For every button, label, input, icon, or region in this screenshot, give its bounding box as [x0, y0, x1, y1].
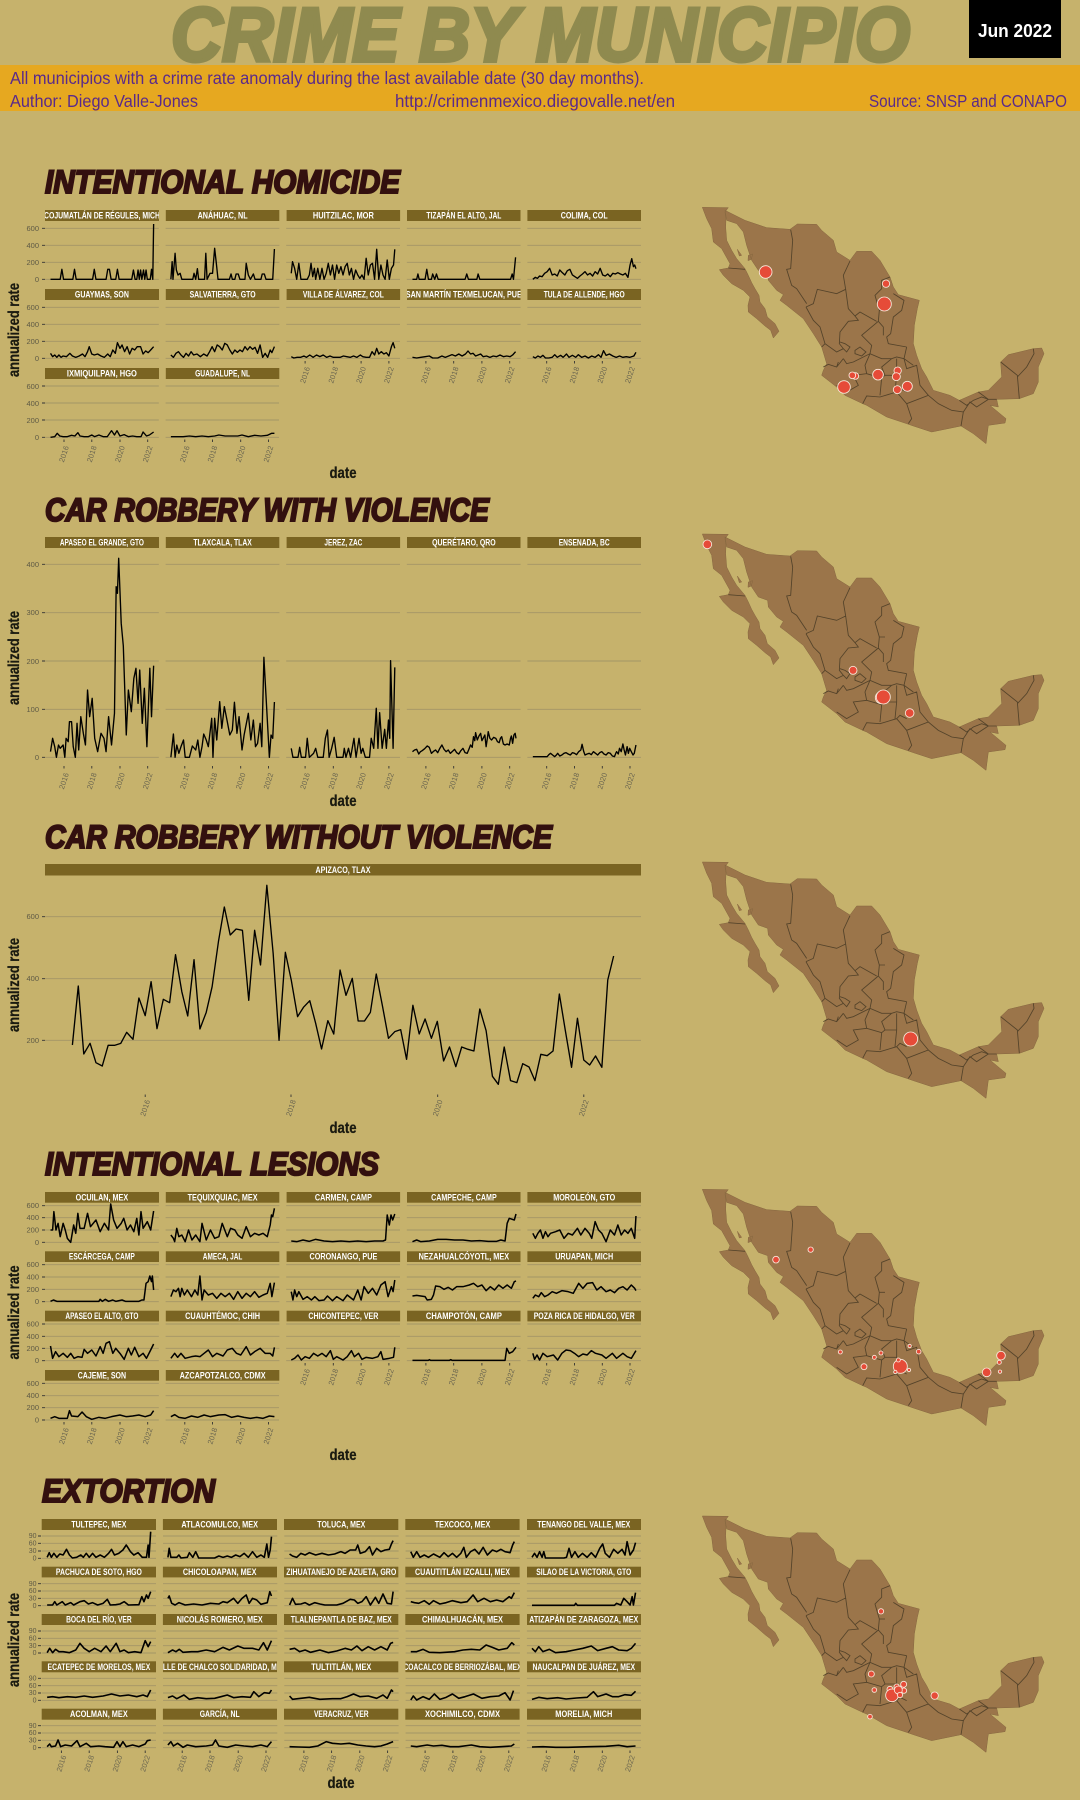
panel: Ensenada: ENSENADA, BC: [559, 538, 610, 548]
x axis labels: 2020: [354, 772, 368, 790]
y axis labels: 60: [29, 1540, 37, 1548]
panel: Atlacomulco: [163, 1519, 277, 1558]
x axis labels: 2022: [262, 1427, 275, 1445]
x axis labels: 2022: [382, 772, 396, 790]
x axis labels: 2020: [113, 1427, 127, 1445]
panel: Campeche: [407, 1192, 520, 1242]
panel: Morelia: [527, 1709, 641, 1747]
panel: Valle de Chalco: [154, 1661, 286, 1699]
panel: Atizapán: [527, 1614, 641, 1653]
section: intentional lesions: [6, 1146, 641, 1464]
panel: Acolman: ACOLMAN, MEX: [70, 1709, 128, 1719]
y axis labels: 200: [26, 1226, 39, 1234]
panel: Cojumatlán: [44, 210, 160, 279]
section: extortion: [6, 1473, 641, 1792]
panel: Carmen: [287, 1192, 400, 1242]
y axis labels: 200: [26, 1036, 39, 1045]
y axis labels: [26, 224, 39, 442]
map: intentional lesions: [702, 1189, 1044, 1426]
date badge: Jun 2022: [978, 21, 1052, 41]
panel: Tultepec: [42, 1519, 156, 1558]
x axis labels: 2016: [539, 1754, 553, 1773]
x axis labels: 2016: [178, 772, 192, 790]
x axis labels: 2020: [353, 1754, 367, 1773]
x axis labels: 2020: [431, 1099, 445, 1117]
panel: Cuautitlán Izcalli: [405, 1567, 520, 1604]
x axis labels: 2018: [326, 1368, 340, 1386]
y axis labels: 200: [26, 416, 39, 425]
y axis labels: 400: [26, 974, 39, 983]
panel: Tenango del Valle: [527, 1519, 641, 1558]
x axis labels: 2018: [446, 1754, 460, 1773]
x axis labels: 2022: [623, 1368, 637, 1386]
y axis labels: 0: [35, 1356, 39, 1365]
heading: INTENTIONAL LESIONS: [45, 1146, 380, 1182]
y axis labels: 30: [29, 1738, 37, 1744]
panel: Tlaxcala: [166, 537, 279, 757]
x axis labels: 2022: [623, 772, 637, 790]
panel: Apaseo el Alto: [45, 1311, 159, 1359]
y axis labels: 0: [33, 1650, 37, 1657]
x axis labels: 2020: [475, 366, 489, 384]
x axis labels: 2022: [502, 1754, 516, 1773]
panel: Escárcega: [45, 1251, 159, 1301]
x axis labels: 2016: [175, 1754, 189, 1773]
x axis labels: 2018: [203, 1754, 217, 1773]
y axis title: annualized rate: [6, 938, 23, 1032]
y axis labels: 600: [26, 224, 39, 233]
x axis labels: 2022: [623, 366, 637, 384]
heading: EXTORTION: [42, 1473, 216, 1509]
panel: Cuauhtémoc: CUAUHTÉMOC, CHIH: [185, 1311, 260, 1321]
panel: García: [163, 1709, 277, 1747]
panel: Tlalnepantla: [284, 1614, 398, 1653]
y axis labels: 90: [29, 1581, 37, 1588]
y axis labels: 600: [26, 912, 39, 921]
x axis labels: 2020: [113, 772, 127, 790]
y axis labels: 100: [26, 705, 39, 714]
panel: Ameca: AMECA, JAL: [203, 1252, 243, 1262]
panel: Veracruz: [284, 1709, 398, 1747]
panel: Anáhuac: ANÁHUAC, NL: [198, 210, 248, 220]
panel: Ecatepec: [42, 1661, 156, 1698]
panel: Naucalpan: [527, 1661, 641, 1699]
x axis labels: 2018: [206, 445, 219, 463]
x axis labels: 2016: [419, 366, 433, 384]
y axis labels: 0: [35, 1238, 39, 1247]
panel: Boca del Río: [42, 1614, 156, 1653]
x axis labels: 2020: [234, 445, 248, 463]
panel: Toluca: TOLUCA, MEX: [317, 1520, 365, 1530]
x axis labels: 2016: [419, 772, 433, 790]
x axis labels: 2016: [540, 366, 554, 384]
panel: Azcapotzalco: AZCAPOTZALCO, CDMX: [180, 1370, 266, 1380]
panel: Tlaxcala: TLAXCALA, TLAX: [193, 538, 252, 548]
x axis title: date: [330, 1447, 357, 1464]
panel: Apaseo el Grande: [45, 537, 159, 757]
panel: Silao: SILAO DE LA VICTORIA, GTO: [536, 1567, 631, 1577]
panel: Pachuca de Soto: PACHUCA DE SOTO, HGO: [56, 1567, 142, 1577]
panel: Champotón: CHAMPOTÓN, CAMP: [426, 1310, 502, 1321]
panel: Colima: COLIMA, COL: [561, 210, 608, 220]
panel: Anáhuac: [166, 210, 279, 279]
heading: CAR ROBBERY WITH VIOLENCE: [45, 492, 490, 528]
header band: All municipios with a crime rate anomaly during the last available date (30 day months).: [10, 68, 644, 88]
panel: Chimalhuacán: [405, 1614, 520, 1653]
x axis labels: 2016: [57, 772, 71, 790]
panel: Chicoloapan: [163, 1567, 277, 1605]
y axis labels: 200: [26, 657, 39, 666]
x axis labels: 2018: [325, 1754, 338, 1773]
y axis labels: 60: [29, 1730, 37, 1737]
panel: Ensenada: [527, 537, 641, 757]
panel: Ecatepec: ECATEPEC DE MORELOS, MEX: [48, 1662, 150, 1672]
panel: Silao: [527, 1567, 641, 1605]
y axis labels: 30: [29, 1548, 37, 1555]
x axis labels: 2020: [354, 366, 368, 384]
panel: Coronango: CORONANGO, PUE: [310, 1252, 377, 1262]
panel: Ixmiquilpan: [45, 368, 159, 437]
panel: Uruapan: URUAPAN, MICH: [555, 1252, 613, 1262]
panel: Poza Rica: POZA RICA DE HIDALGO, VER: [534, 1311, 635, 1321]
x axis title: date: [328, 1775, 355, 1792]
y axis labels: 30: [29, 1596, 37, 1602]
panel: Naucalpan: NAUCALPAN DE JUÁREZ, MEX: [532, 1662, 635, 1672]
map: car robbery without violence: [702, 862, 1044, 1098]
panel: Moroleón: [527, 1191, 641, 1242]
panel: Champotón: [407, 1310, 520, 1360]
panel: Boca del Río: BOCA DEL RÍO, VER: [66, 1614, 132, 1624]
y axis labels: 400: [26, 1213, 39, 1222]
panel: Chimalhuacán: CHIMALHUACÁN, MEX: [422, 1614, 503, 1624]
panel: Texcoco: [405, 1519, 520, 1557]
panel: Xochimilco: [405, 1709, 520, 1747]
x axis labels: 2020: [475, 1368, 489, 1386]
panel: Chicontepec: CHICONTEPEC, VER: [308, 1311, 379, 1321]
y axis labels: [29, 1533, 37, 1752]
y axis labels: 0: [35, 1416, 39, 1424]
y axis labels: 600: [26, 1320, 39, 1328]
panel: Ixmiquilpan: IXMIQUILPAN, HGO: [67, 368, 137, 378]
map: extortion: [702, 1516, 1044, 1752]
x axis labels: 2018: [568, 366, 581, 384]
y axis labels: 200: [26, 1285, 39, 1294]
x axis labels: [138, 1099, 591, 1117]
y axis labels: 0: [33, 1745, 37, 1752]
x axis labels: 2018: [568, 1368, 581, 1386]
panel: Uruapan: [527, 1251, 641, 1298]
y axis labels: [26, 560, 39, 762]
section: car robbery with violence: [6, 492, 641, 810]
panel: Villa de Álvarez: [287, 289, 400, 358]
panel: Cuautitlán Izcalli: CUAUTITLÁN IZCALLI, MEX: [415, 1567, 510, 1577]
y axis labels: 400: [26, 241, 39, 250]
panel: Guaymas: GUAYMAS, SON: [75, 290, 129, 300]
y axis labels: 200: [26, 337, 39, 346]
x axis labels: [57, 1368, 637, 1445]
x axis labels: 2016: [178, 445, 192, 463]
panel: Coacalco: [404, 1661, 522, 1700]
x axis labels: 2016: [298, 1368, 312, 1386]
y axis labels: 0: [35, 433, 39, 442]
x axis labels: 2018: [206, 772, 219, 790]
panel: San Martín Texmelucan: [406, 289, 522, 358]
panel: Cajeme: [45, 1370, 159, 1419]
panel: Moroleón: MOROLEÓN, GTO: [553, 1191, 615, 1202]
x axis labels: 2016: [540, 1368, 554, 1386]
panel: Texcoco: TEXCOCO, MEX: [435, 1520, 490, 1530]
y axis labels: 90: [29, 1628, 37, 1635]
x axis labels: 2018: [568, 772, 581, 790]
y axis title: annualized rate: [6, 611, 23, 705]
panel: Salvatierra: SALVATIERRA, GTO: [190, 290, 256, 300]
x axis labels: 2018: [568, 1754, 581, 1773]
x axis labels: 2018: [326, 366, 340, 384]
y axis labels: 200: [26, 258, 39, 267]
x axis labels: 2016: [540, 772, 554, 790]
section: intentional homicide: [6, 164, 641, 482]
x axis labels: 2018: [326, 772, 340, 790]
x axis labels: 2020: [111, 1754, 124, 1773]
x axis labels: 2022: [503, 772, 517, 790]
x axis labels: 2020: [354, 1368, 368, 1386]
panel: Tizapán: [407, 210, 520, 279]
x axis title: date: [330, 793, 357, 810]
x axis labels: 2018: [82, 1754, 96, 1773]
panel: Villa de Álvarez: VILLA DE ÁLVAREZ, COL: [303, 290, 384, 300]
x axis labels: 2018: [284, 1099, 298, 1117]
panel: Jerez: [287, 537, 400, 757]
panel: Tula de Allende: TULA DE ALLENDE, HGO: [544, 290, 625, 300]
x axis labels: 2022: [577, 1099, 591, 1117]
x axis labels: 2022: [141, 1427, 155, 1445]
y axis labels: 30: [29, 1690, 37, 1697]
y axis labels: 600: [26, 303, 39, 312]
panel: Colima: [527, 210, 641, 279]
panel: Atizapán: ATIZAPÁN DE ZARAGOZA, MEX: [529, 1614, 638, 1624]
panel: Zihuatanejo: ZIHUATANEJO DE AZUETA, GRO: [286, 1567, 396, 1577]
heading: CAR ROBBERY WITHOUT VIOLENCE: [45, 819, 553, 855]
panel: Acolman: [42, 1709, 156, 1747]
x axis labels: 2022: [138, 1754, 152, 1773]
y axis labels: 0: [35, 1297, 39, 1306]
date badge: [969, 0, 1061, 58]
panel: Ocuilan: [45, 1192, 159, 1242]
x axis labels: 2016: [55, 1754, 68, 1773]
y axis labels: 0: [35, 753, 39, 762]
y axis labels: 600: [26, 1260, 39, 1269]
x axis labels: 2022: [503, 1368, 517, 1386]
panel: Toluca: [284, 1519, 398, 1557]
panel: Tultepec: TULTEPEC, MEX: [71, 1520, 126, 1530]
panel: Tequixquiac: [166, 1192, 279, 1242]
panel: Coronango: [287, 1251, 400, 1301]
panel: Nezahualcóyotl: [407, 1251, 520, 1300]
panel: Apizaco: APIZACO, TLAX: [316, 865, 370, 875]
y axis title: annualized rate: [6, 1265, 23, 1360]
panel: Guadalupe: [166, 368, 279, 437]
x axis labels: 2016: [178, 1427, 192, 1445]
y axis labels: 0: [33, 1603, 37, 1610]
panel: Chicoloapan: CHICOLOAPAN, MEX: [183, 1567, 256, 1577]
panel: Apaseo el Grande: APASEO EL GRANDE, GTO: [60, 538, 144, 548]
panel: Apaseo el Alto: APASEO EL ALTO, GTO: [65, 1311, 138, 1321]
x axis labels: 2016: [419, 1368, 433, 1386]
map: car robbery with violence: [702, 534, 1044, 770]
panel: Nicolás Romero: NICOLÁS ROMERO, MEX: [177, 1614, 263, 1624]
x axis title: date: [330, 465, 357, 482]
panel: Ameca: [166, 1251, 279, 1300]
panel: Ocuilan: OCUILAN, MEX: [76, 1192, 128, 1202]
x axis labels: 2020: [595, 1368, 609, 1386]
y axis labels: 400: [26, 560, 39, 569]
panel: Huitzilac: [287, 210, 400, 279]
panel: Cuauhtémoc: [166, 1311, 279, 1358]
panel: Querétaro: QUERÉTARO, QRO: [432, 538, 496, 548]
x axis labels: 2020: [234, 772, 248, 790]
x axis labels: 2016: [297, 1754, 311, 1773]
panel: Zihuatanejo: [284, 1567, 398, 1605]
panel: Pachuca de Soto: [42, 1567, 156, 1605]
y axis labels: 90: [29, 1723, 37, 1730]
panel: Tizapán: TIZAPÁN EL ALTO, JAL: [426, 210, 502, 220]
x axis labels: 2020: [595, 366, 609, 384]
header band: [0, 65, 1080, 111]
y axis labels: 600: [26, 1201, 39, 1210]
x axis labels: 2022: [623, 1754, 637, 1773]
panel: Guadalupe: GUADALUPE, NL: [195, 368, 250, 378]
y axis labels: 60: [29, 1683, 37, 1690]
x axis labels: 2016: [138, 1099, 152, 1117]
panel: Atlacomulco: ATLACOMULCO, MEX: [181, 1520, 258, 1530]
x axis title: date: [330, 1120, 357, 1137]
x axis labels: 2020: [234, 1427, 248, 1445]
y axis title: annualized rate: [6, 283, 23, 377]
map: intentional homicide: [702, 207, 1044, 444]
x axis labels: 2020: [113, 445, 127, 463]
panel: Apizaco: [45, 864, 641, 1084]
panel: Salvatierra: [166, 289, 279, 357]
y axis labels: [26, 912, 39, 1045]
y axis labels: 30: [29, 1643, 37, 1650]
panel: Escárcega: ESCÁRCEGA, CAMP: [69, 1252, 135, 1262]
y axis labels: 200: [26, 1403, 39, 1412]
x axis labels: 2020: [475, 772, 489, 790]
x axis labels: 2016: [418, 1754, 432, 1773]
panel: Carmen: CARMEN, CAMP: [315, 1192, 372, 1202]
panel: Xochimilco: XOCHIMILCO, CDMX: [425, 1709, 500, 1719]
x axis labels: 2016: [57, 1427, 71, 1445]
x axis labels: [57, 366, 637, 463]
y axis labels: 400: [26, 1332, 39, 1341]
y axis labels: 90: [29, 1533, 37, 1540]
y axis labels: 0: [35, 354, 39, 363]
y axis labels: 60: [29, 1588, 37, 1595]
x axis labels: 2022: [382, 366, 396, 384]
x axis labels: 2018: [85, 772, 99, 790]
x axis labels: 2016: [57, 445, 71, 463]
panel: Chicontepec: [287, 1311, 400, 1360]
y axis labels: 600: [26, 382, 39, 391]
y axis labels: 400: [26, 399, 39, 408]
x axis labels: 2018: [85, 445, 99, 463]
x axis labels: 2022: [262, 445, 275, 463]
x axis labels: 2018: [447, 366, 461, 384]
y axis labels: 0: [33, 1556, 37, 1562]
header band: Author: Diego Valle-Jones: [10, 91, 198, 111]
y axis labels: 200: [26, 1344, 39, 1353]
x axis labels: [57, 772, 637, 790]
panel: García: GARCÍA, NL: [200, 1709, 240, 1719]
panel: Nicolás Romero: [163, 1614, 277, 1653]
panel: Nezahualcóyotl: NEZAHUALCÓYOTL, MEX: [419, 1251, 509, 1262]
x axis labels: 2020: [474, 1754, 488, 1773]
y axis labels: 400: [26, 1391, 39, 1400]
panel: Poza Rica: [527, 1311, 641, 1360]
panel: Tequixquiac: TEQUIXQUIAC, MEX: [188, 1192, 258, 1202]
x axis labels: 2022: [503, 366, 517, 384]
x axis labels: 2022: [259, 1754, 273, 1773]
x axis labels: 2018: [206, 1427, 219, 1445]
y axis labels: 400: [26, 1272, 39, 1282]
x axis labels: 2020: [595, 772, 609, 790]
x axis labels: 2016: [298, 366, 312, 384]
panel: Jerez: JEREZ, ZAC: [324, 538, 363, 548]
section: car robbery without violence: [6, 819, 641, 1137]
panel: Azcapotzalco: [166, 1370, 279, 1418]
panel: Tultitlán: TULTITLÁN, MEX: [311, 1662, 371, 1672]
panel: Cajeme: CAJEME, SON: [78, 1370, 126, 1380]
x axis labels: 2018: [447, 772, 461, 790]
x axis labels: 2016: [298, 772, 312, 790]
y axis labels: 600: [26, 1379, 39, 1388]
x axis labels: 2022: [141, 772, 155, 790]
panel: Tultitlán: [284, 1661, 398, 1699]
x axis labels: 2020: [231, 1754, 245, 1773]
x axis labels: 2022: [381, 1754, 394, 1773]
y axis labels: 0: [33, 1698, 37, 1704]
panel: Veracruz: VERACRUZ, VER: [314, 1709, 369, 1719]
panel: Tula de Allende: [527, 289, 641, 358]
x axis labels: 2022: [262, 772, 275, 790]
x axis labels: 2022: [382, 1368, 396, 1386]
panel: Tenango del Valle: TENANGO DEL VALLE, MEX: [537, 1520, 630, 1530]
x axis labels: 2020: [595, 1754, 609, 1773]
y axis labels: 300: [26, 608, 39, 617]
y axis labels: [26, 1201, 39, 1424]
x axis labels: 2018: [447, 1368, 461, 1386]
y axis labels: 60: [29, 1636, 37, 1642]
panel: Campeche: CAMPECHE, CAMP: [431, 1192, 497, 1202]
x axis labels: 2018: [85, 1427, 99, 1445]
y axis labels: 90: [29, 1676, 37, 1682]
panel: Morelia: MORELIA, MICH: [555, 1709, 612, 1719]
y axis labels: 400: [26, 320, 39, 329]
panel: Huitzilac: HUITZILAC, MOR: [313, 210, 374, 220]
panel: Tlalnepantla: TLALNEPANTLA DE BAZ, MEX: [291, 1614, 392, 1624]
header band: http://crimenmexico.diegovalle.net/en: [395, 91, 675, 111]
panel: Guaymas: [45, 289, 159, 357]
y axis title: annualized rate: [6, 1593, 23, 1687]
y axis labels: 0: [35, 275, 39, 284]
panel: Querétaro: [407, 537, 520, 754]
heading: INTENTIONAL HOMICIDE: [45, 164, 402, 200]
x axis labels: 2022: [141, 445, 155, 463]
x axis labels: [55, 1754, 637, 1773]
